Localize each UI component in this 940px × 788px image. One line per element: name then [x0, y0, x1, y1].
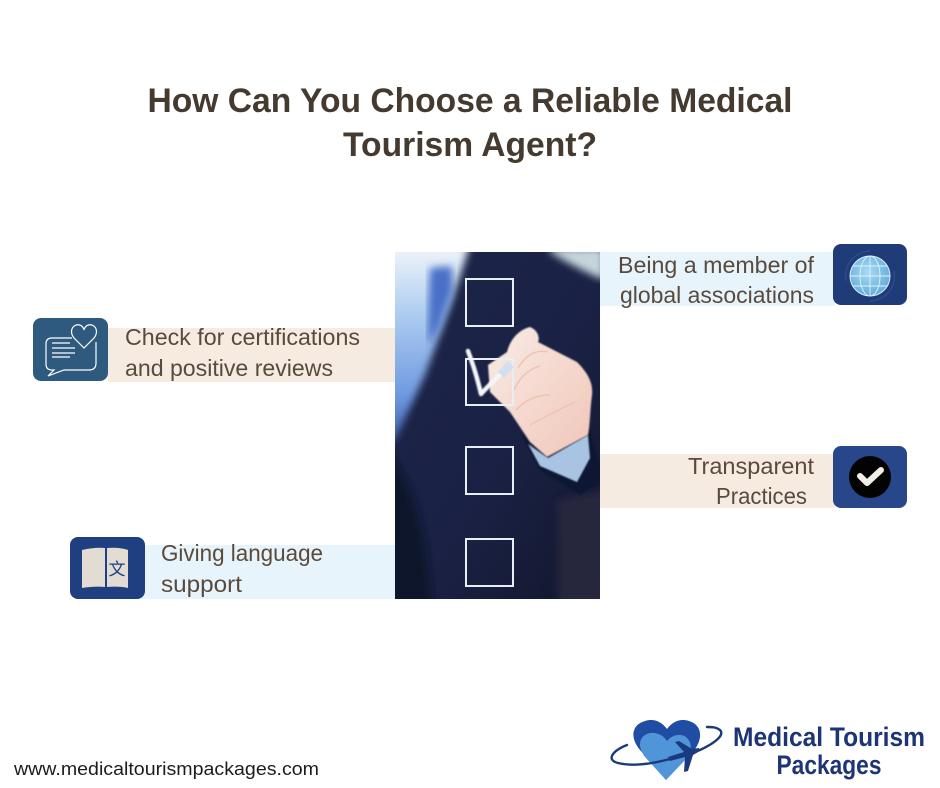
panel: global associations band: global associations: [620, 282, 814, 308]
panel: global associations band: Being a member of: [618, 252, 815, 278]
shirt cuff: [528, 435, 590, 482]
logo plane: [668, 741, 700, 772]
logo: Medical Tourism Packages: Packages: [776, 750, 882, 780]
panel: transparent practices band: [600, 453, 835, 509]
title: How Can You Choose a Reliable Medical: [148, 82, 792, 120]
checkboxes: [466, 279, 513, 586]
icon: check mark badge: [833, 446, 907, 508]
hand-drawn check mark: [468, 351, 504, 394]
photo: businessman ticking a checklist: [395, 252, 600, 599]
hand: [488, 327, 592, 457]
icon: globe: [833, 244, 907, 305]
panel: language support band: support: [161, 571, 243, 597]
website url: www.medicaltourismpackages.com: [13, 758, 319, 779]
panel: certifications band: Check for certifications: [125, 324, 360, 350]
panel: certifications band: and positive reviews: [125, 355, 333, 381]
panel: transparent practices band: Transparent: [688, 453, 815, 479]
logo heart: [633, 720, 700, 780]
panel: language support band: [116, 540, 395, 599]
icon: translation book: [70, 537, 145, 599]
panel: global associations band: [600, 252, 835, 308]
logo: Medical Tourism Packages: [612, 720, 925, 780]
icon: speech bubbles with heart: [33, 318, 108, 381]
title: Tourism Agent?: [343, 126, 597, 164]
pen: [498, 361, 514, 378]
title: [148, 82, 792, 164]
panel: certifications band: [108, 324, 395, 382]
logo orbit: [612, 727, 721, 765]
logo: Medical Tourism Packages: Medical Tourism: [733, 722, 925, 752]
icon: translation book: 文: [108, 560, 126, 579]
panel: language support band: Giving language: [161, 540, 323, 566]
panel: transparent practices band: Practices: [716, 483, 807, 509]
